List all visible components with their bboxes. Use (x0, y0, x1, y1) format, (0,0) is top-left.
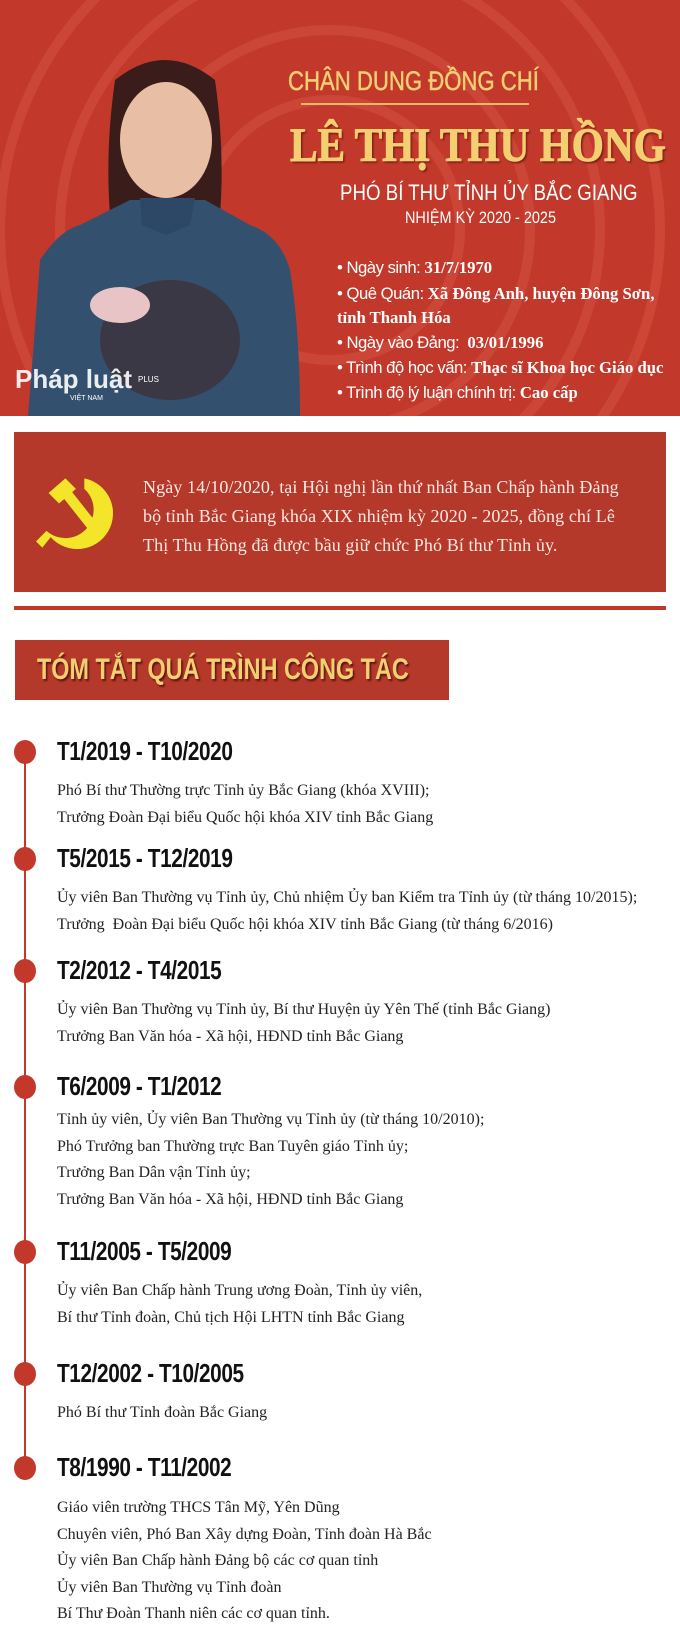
item 3: T2/2012 - T4/2015 (57, 955, 221, 985)
item 5: T11/2005 - T5/2009 (57, 1236, 231, 1266)
name: LÊ THỊ THU HỒNG (290, 119, 666, 172)
item 4: Phó Trưởng ban Thường trực Ban Tuyên giáo Tỉnh ủy; (57, 1138, 408, 1154)
bio bullets: • Ngày vào Đảng: 03/01/1996 (337, 333, 543, 352)
item 3 (14, 955, 550, 1044)
item 1: Phó Bí thư Thường trực Tỉnh ủy Bắc Giang (khóa XVIII); (57, 782, 430, 799)
item 5 (14, 1236, 422, 1326)
item 1: Trưởng Đoàn Đại biểu Quốc hội khóa XIV tỉnh Bắc Giang (57, 808, 433, 826)
item 7: Ủy viên Ban Chấp hành Đảng bộ các cơ quan tỉnh (57, 1552, 378, 1569)
item 1 (14, 736, 433, 826)
header panel: NHIỆM KỲ 2020 - 2025 (405, 208, 556, 227)
item 7: Bí Thư Đoàn Thanh niên các cơ quan tỉnh. (57, 1605, 330, 1622)
item 7: Giáo viên trường THCS Tân Mỹ, Yên Dũng (57, 1499, 340, 1516)
bio bullets: • Trình độ học vấn: Thạc sĩ Khoa học Giáo dục (337, 358, 663, 377)
position: PHÓ BÍ THƯ TỈNH ỦY BẮC GIANG (340, 180, 638, 205)
item 2 (14, 843, 637, 932)
item 2: Ủy viên Ban Thường vụ Tỉnh ủy, Chủ nhiệm Ủy ban Kiểm tra Tỉnh ủy (từ tháng 10/2015); (57, 889, 637, 906)
item 7: Ủy viên Ban Thường vụ Tỉnh đoàn (57, 1578, 282, 1596)
portrait photo (15, 60, 300, 416)
portrait photo: VIỆT NAM (70, 393, 103, 402)
item 7: Chuyên viên, Phó Ban Xây dựng Đoàn, Tỉnh đoàn Hà Bắc (57, 1526, 432, 1542)
item 3: Trưởng Ban Văn hóa - Xã hội, HĐND tỉnh Bắc Giang (57, 1028, 403, 1044)
item 3: Ủy viên Ban Thường vụ Tỉnh ủy, Bí thư Huyện ủy Yên Thế (tỉnh Bắc Giang) (57, 1001, 550, 1018)
item 4: Tỉnh ủy viên, Ủy viên Ban Thường vụ Tỉnh ủy (từ tháng 10/2010); (57, 1111, 484, 1128)
item 5: Bí thư Tỉnh đoàn, Chủ tịch Hội LHTN tỉnh Bắc Giang (57, 1308, 404, 1326)
bio bullets: • Trình độ lý luận chính trị: Cao cấp (337, 383, 578, 402)
item 2: T5/2015 - T12/2019 (57, 843, 233, 873)
item 4 (14, 1071, 484, 1208)
item 7: T8/1990 - T11/2002 (57, 1452, 231, 1482)
item 4: Trưởng Ban Dân vận Tỉnh ủy; (57, 1164, 251, 1181)
item 2: Trưởng Đoàn Đại biểu Quốc hội khóa XIV tỉnh Bắc Giang (từ tháng 6/2016) (57, 916, 553, 932)
statement text: Ngày 14/10/2020, tại Hội nghị lần thứ nhất Ban Chấp hành Đảng bộ tỉnh Bắc Giang khóa XIX nhiệm kỳ 2020 - 2025, đồng chí Lê Thị Thu Hồng đã được bầu giữ chức Phó Bí thư Tỉnh ủy. (143, 477, 619, 555)
header panel (0, 0, 680, 416)
item 4: T6/2009 - T1/2012 (57, 1071, 221, 1101)
timeline (14, 736, 637, 1622)
bio bullets: tỉnh Thanh Hóa (337, 308, 451, 327)
section heading: TÓM TẮT QUÁ TRÌNH CÔNG TÁC (37, 653, 409, 686)
logo: Pháp luật (15, 364, 132, 394)
icon: hammer and sickle (36, 478, 113, 549)
background drum pattern (0, 0, 665, 416)
section heading (15, 640, 449, 700)
election panel (14, 432, 666, 592)
item 1: T1/2019 - T10/2020 (57, 736, 233, 766)
item 6: T12/2002 - T10/2005 (57, 1358, 244, 1388)
bio bullets: • Quê Quán: Xã Đông Anh, huyện Đông Sơn, (337, 284, 654, 303)
item 5: Ủy viên Ban Chấp hành Trung ương Đoàn, Tỉnh ủy viên, (57, 1282, 422, 1299)
portrait photo: PLUS (138, 375, 159, 384)
item 4: Trưởng Ban Văn hóa - Xã hội, HĐND tỉnh Bắc Giang (57, 1190, 403, 1208)
item 6: Phó Bí thư Tỉnh đoàn Bắc Giang (57, 1404, 267, 1421)
item 6 (14, 1358, 267, 1421)
item 7 (14, 1452, 432, 1622)
bio bullets (337, 258, 663, 402)
bio bullets: • Ngày sinh: 31/7/1970 (337, 258, 492, 277)
heading: chan dung: CHÂN DUNG ĐỒNG CHÍ (288, 66, 539, 96)
